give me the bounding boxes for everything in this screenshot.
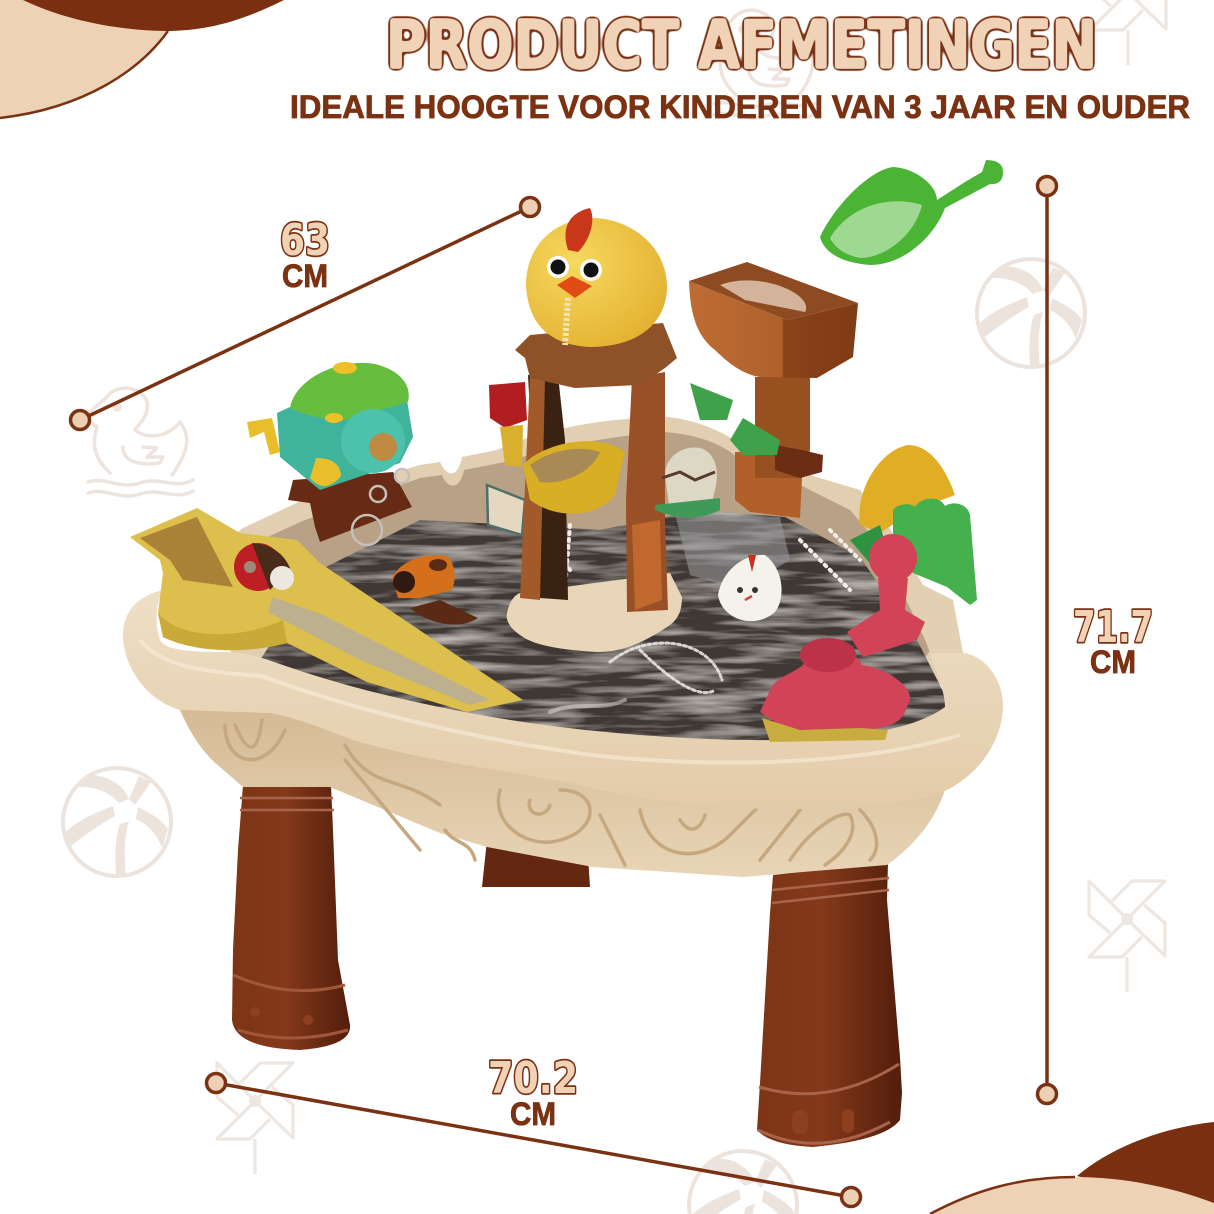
basin back wall lip [163, 417, 963, 720]
dimension: depth 63 cm: 63 [280, 215, 330, 266]
dino camera toy [247, 362, 413, 490]
camera stand [288, 472, 412, 542]
water splash [550, 525, 860, 712]
left leg [232, 785, 350, 1050]
water [260, 510, 955, 745]
right wall post [913, 582, 963, 653]
yellow bowl [523, 441, 625, 514]
white chick toy [718, 555, 782, 621]
back leg [482, 840, 590, 887]
tower legs [520, 372, 668, 612]
red pump cap [800, 638, 856, 672]
rim highlight [140, 640, 960, 763]
water table product [123, 160, 1003, 1147]
corner decoration: bottom right [930, 1122, 1214, 1214]
subtitle: IDEALE HOOGTE VOOR KINDEREN VAN 3 JAAR EN OUDER [290, 89, 1190, 125]
dimension: width 70.2 cm: CM [510, 1096, 556, 1132]
yellow base under pump [762, 718, 888, 742]
dimension: height 71.7 cm: 71.7 [1073, 602, 1153, 653]
yellow slide [130, 508, 523, 712]
basin inner wall [250, 432, 930, 700]
orange toy car [392, 555, 478, 625]
green scoop [820, 160, 1003, 265]
carved basin [178, 705, 945, 877]
tower mound [507, 573, 682, 652]
bubbles [352, 469, 409, 545]
right yellow bowl [859, 445, 955, 533]
corner decoration: top left [0, 0, 284, 118]
dimension: depth 63 cm: CM [282, 258, 328, 294]
ladybug [234, 543, 294, 591]
chick toy [526, 208, 667, 347]
dimension: width 70.2 cm: 70.2 [488, 1053, 578, 1104]
leaves [690, 383, 780, 455]
red pump toy [760, 534, 925, 733]
right leg [757, 862, 902, 1147]
tower top [515, 323, 677, 388]
funnel tower [689, 262, 858, 518]
light reflection on water [675, 513, 790, 590]
egg toy [655, 447, 720, 518]
dimension: height 71.7 cm: CM [1090, 644, 1136, 680]
dimension: depth 63 cm [70, 198, 540, 430]
frog toy [850, 499, 977, 605]
red toy [489, 382, 527, 467]
dimension: width 70.2 cm [206, 1053, 860, 1206]
rim [123, 590, 1003, 809]
water wheel [487, 485, 525, 535]
dimension: height 71.7 cm [1038, 176, 1153, 1104]
